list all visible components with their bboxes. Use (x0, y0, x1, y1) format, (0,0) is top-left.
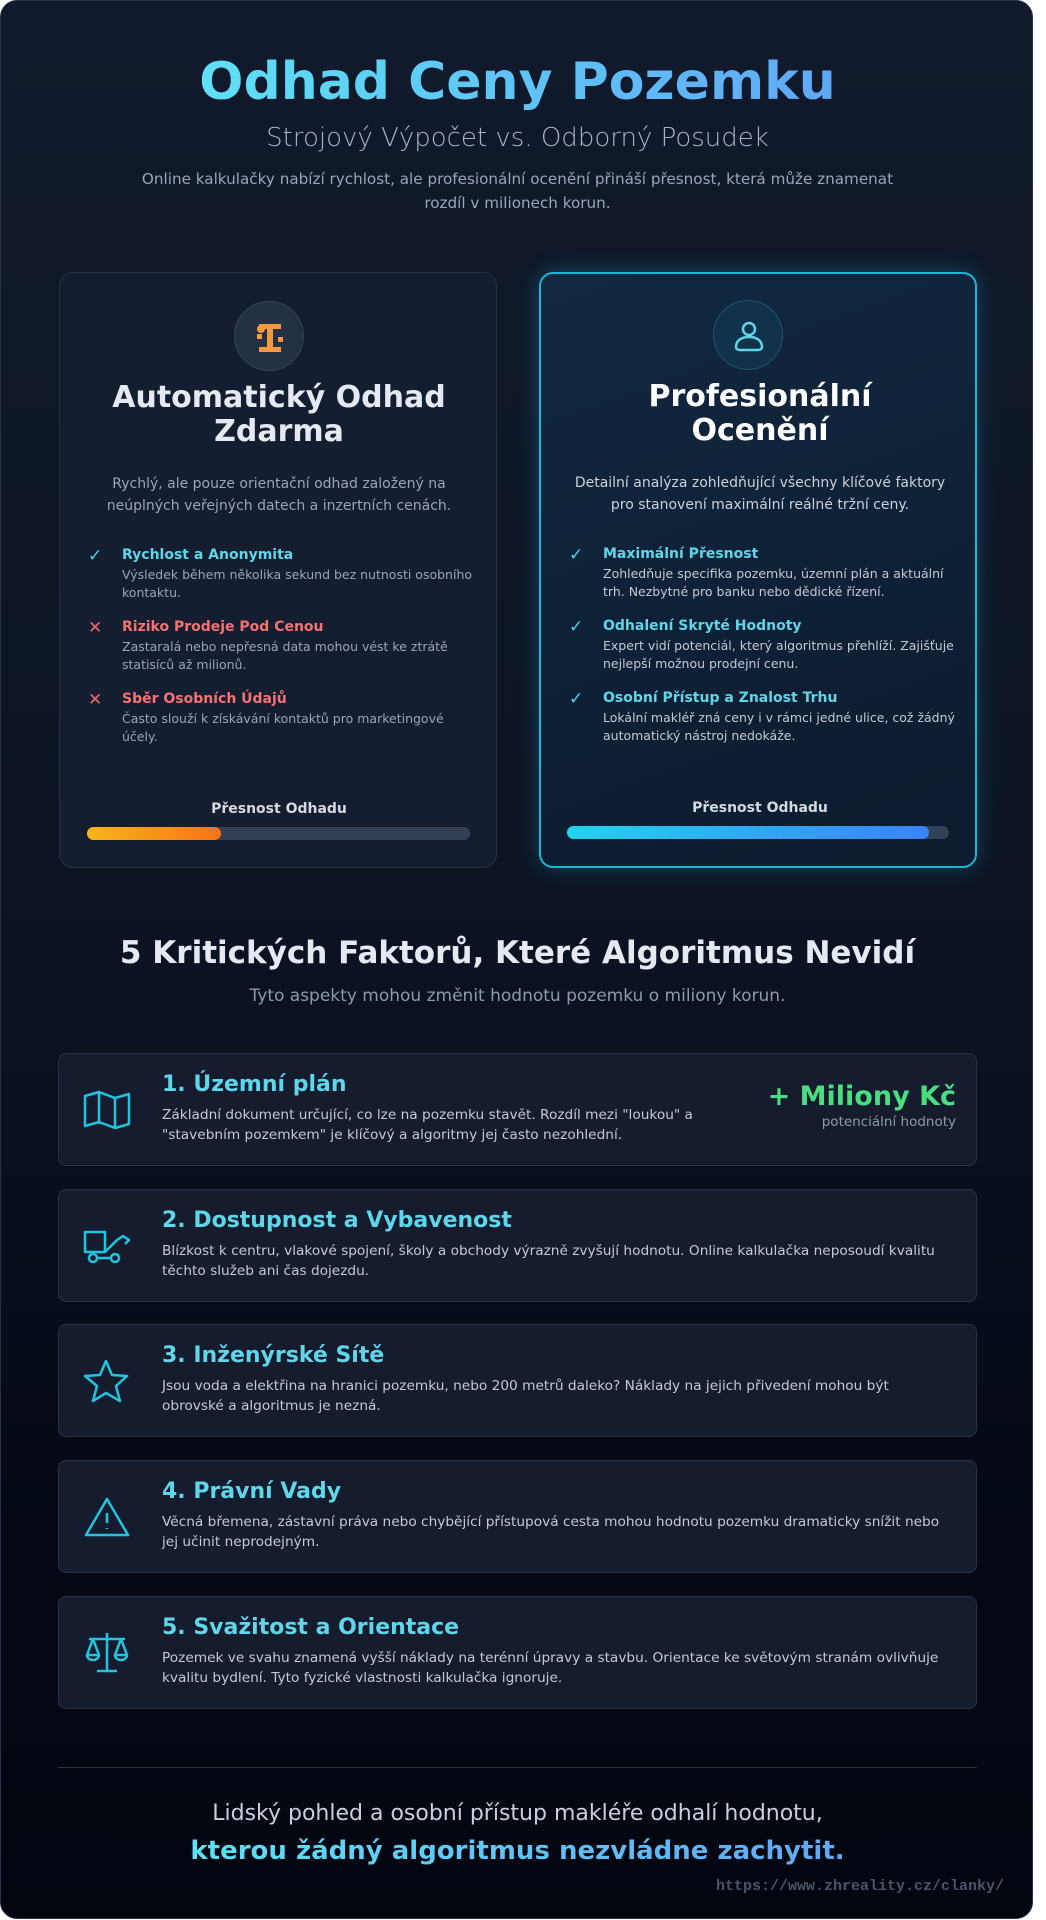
icon: algorithm (234, 301, 304, 371)
item: risk: ✕ (88, 618, 102, 638)
panel: professional valuation (539, 272, 977, 868)
item: personal approach (569, 689, 955, 743)
item: hidden value: Odhalení Skryté Hodnoty (603, 618, 802, 634)
precision bar (567, 826, 949, 839)
item: speed: Výsledek během několika sekund bez nutnosti osobního kontaktu. (122, 567, 472, 600)
item: data collection: ✕ (88, 690, 102, 710)
factor title: 1. Územní plán (162, 1072, 346, 1097)
icon: warning (84, 1498, 130, 1536)
item: personal approach: ✓ (569, 689, 583, 709)
item: speed (88, 546, 472, 600)
footer statement: Lidský pohled a osobní přístup makléře odhalí hodnotu, (212, 1801, 823, 1826)
factor 2 (58, 1189, 977, 1302)
item: risk: Riziko Prodeje Pod Cenou (122, 619, 324, 635)
factor 3 (58, 1324, 977, 1437)
item: precision: Maximální Přesnost (603, 546, 758, 562)
icon: scales (86, 1633, 128, 1672)
precision label: Přesnost Odhadu (211, 801, 347, 817)
item: precision: ✓ (569, 545, 583, 565)
icon: person (713, 300, 783, 370)
factor title: 2. Dostupnost a Vybavenost (162, 1208, 512, 1233)
factor text: Věcná břemena, zástavní práva nebo chybějící přístupová cesta mohou hodnotu pozemku dramaticky snížit nebo jej učinit neprodejným. (162, 1514, 939, 1550)
panel: automatic estimate (59, 272, 497, 868)
item: hidden value (569, 617, 954, 671)
item: personal approach: Lokální makléř zná ceny i v rámci jedné ulice, což žádný automatický nástroj nedokáže. (603, 710, 955, 743)
footer statement (190, 1801, 845, 1866)
icon: truck (84, 1230, 130, 1264)
factor text: Základní dokument určující, co lze na pozemku stavět. Rozdíl mezi "loukou" a "stavebním pozemkem" je klíčový a algoritmy jej často nezohlední. (162, 1107, 693, 1143)
item: speed: Rychlost a Anonymita (122, 547, 293, 563)
item: risk (88, 618, 448, 672)
title: Odhad Ceny Pozemku (199, 52, 836, 112)
item: data collection: Často slouží k získávání kontaktů pro marketingové účely. (122, 711, 444, 744)
item: hidden value: ✓ (569, 617, 583, 637)
factor text: Pozemek ve svahu znamená vyšší náklady na terénní úpravy a stavbu. Orientace ke světovým stranám ovlivňuje kvalitu bydlení. Tyto fyzické vlastnosti kalkulačka ignoruje. (162, 1650, 938, 1686)
item: data collection (88, 690, 444, 744)
factor 4 (58, 1460, 977, 1573)
factor text: Blízkost k centru, vlakové spojení, školy a obchody výrazně zvyšují hodnotu. Online kalkulačka neposoudí kvalitu těchto služeb ani čas dojezdu. (162, 1243, 935, 1279)
item: precision: Zohledňuje specifika pozemku, územní plán a aktuální trh. Nezbytné pro banku nebo dědické řízení. (603, 566, 944, 599)
factor 5 (58, 1596, 977, 1709)
item: speed: ✓ (88, 546, 102, 566)
callout: value (768, 1081, 956, 1130)
callout: value: potenciální hodnoty (822, 1114, 956, 1130)
card title: Ocenění (692, 413, 828, 448)
card title (648, 379, 873, 448)
card title: Automatický Odhad (112, 380, 446, 415)
item: data collection: Sběr Osobních Údajů (122, 691, 287, 707)
card title (112, 380, 446, 449)
item: hidden value: Expert vidí potenciál, který algoritmus přehlíží. Zajišťuje nejlepší možnou prodejní cenu. (603, 638, 954, 671)
factor 1 (58, 1053, 977, 1166)
section subtitle: Tyto aspekty mohou změnit hodnotu pozemku o miliony korun. (250, 986, 785, 1006)
item: risk: Zastaralá nebo nepřesná data mohou vést ke ztrátě statisíců až milionů. (122, 639, 448, 672)
callout: value: + Miliony Kč (768, 1081, 956, 1112)
intro text: Online kalkulačky nabízí rychlost, ale profesionální ocenění přináší přesnost, která může znamenat rozdíl v milionech korun. (142, 170, 893, 212)
icon: map (84, 1090, 130, 1130)
card title: Profesionální (648, 379, 872, 414)
precision bar (87, 827, 470, 840)
factor title: 5. Svažitost a Orientace (162, 1615, 459, 1640)
factor title: 3. Inženýrské Sítě (162, 1343, 384, 1368)
factor title: 4. Právní Vady (162, 1479, 341, 1504)
footer statement: kterou žádný algoritmus nezvládne zachytit. (190, 1836, 845, 1866)
subtitle: Strojový Výpočet vs. Odborný Posudek (266, 123, 769, 153)
factor text: Jsou voda a elektřina na hranici pozemku, nebo 200 metrů daleko? Náklady na jejich přivedení mohou být obrovské a algoritmus je nezná. (162, 1378, 889, 1414)
card description: Detailní analýza zohledňující všechny klíčové faktory pro stanovení maximální reálné tržní ceny. (575, 475, 945, 513)
card title: Zdarma (214, 414, 344, 449)
item: precision (569, 545, 944, 599)
card description: Rychlý, ale pouze orientační odhad založený na neúplných veřejných datech a inzertních cenách. (107, 476, 451, 514)
icon: star (84, 1360, 128, 1402)
section heading: 5 Kritických Faktorů, Které Algoritmus Nevidí (120, 935, 915, 971)
source url: https://www.zhreality.cz/clanky/ (716, 1878, 1004, 1895)
precision label: Přesnost Odhadu (692, 800, 828, 816)
item: personal approach: Osobní Přístup a Znalost Trhu (603, 690, 837, 706)
